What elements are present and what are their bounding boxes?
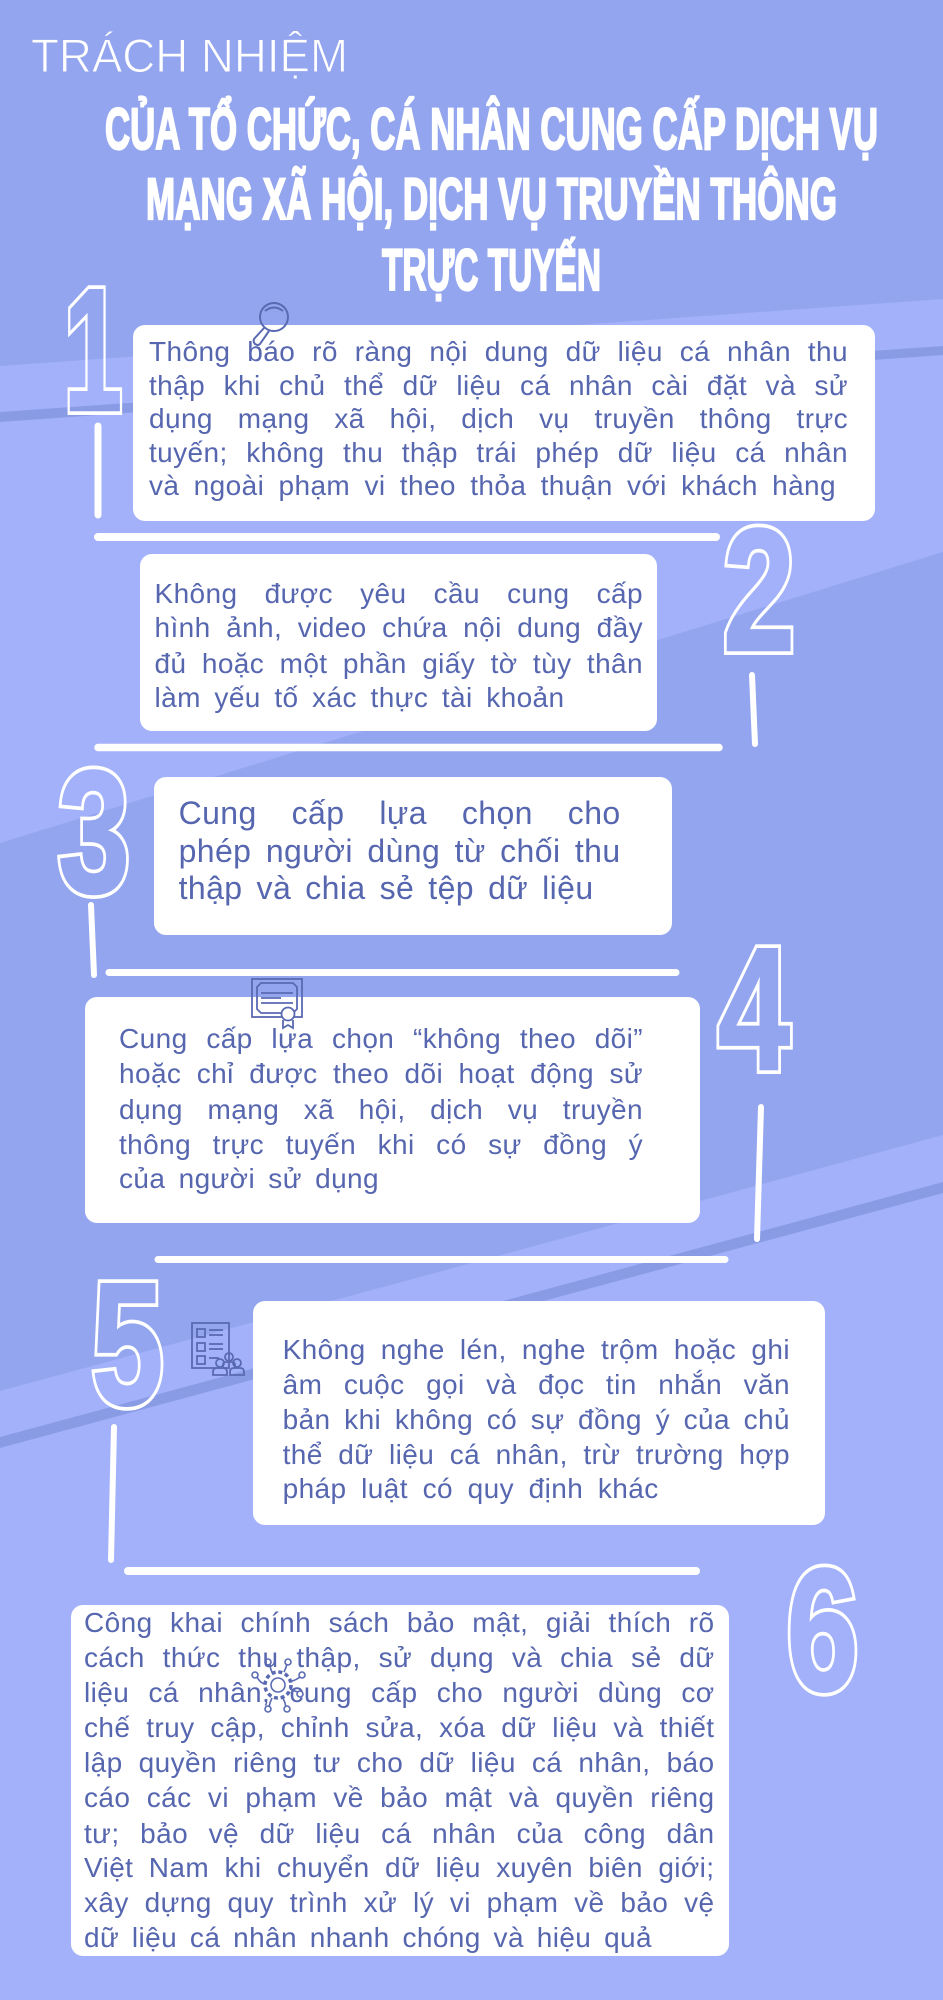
- panel: card 3: [154, 777, 672, 935]
- panel: card 6: cách thức thu thập, sử dụng và chia sẻ dữ: [84, 1642, 714, 1673]
- panel: card 6: dữ liệu cá nhân nhanh chóng và hiệu quả: [84, 1922, 652, 1953]
- panel: card 2: làm yếu tố xác thực tài khoản: [154, 682, 564, 713]
- panel: card 4: hoặc chỉ được theo dõi hoạt động sử: [119, 1058, 643, 1089]
- icon: checklist with people: [191, 1322, 245, 1376]
- panel: card 3: phép người dùng từ chối thu: [179, 833, 621, 869]
- panel: card 1: dụng mạng xã hội, dịch vụ truyền thông trực: [149, 403, 848, 434]
- number 4: 4: [718, 912, 790, 1107]
- panel: card 5: thể dữ liệu cá nhân, trừ trường hợp: [283, 1439, 790, 1470]
- title: TRÁCH NHIỆM: TRÁCH NHIỆM: [31, 29, 348, 82]
- panel: card 6: tư; bảo vệ dữ liệu cá nhân của công dân: [84, 1818, 714, 1849]
- panel: card 5: pháp luật có quy định khác: [283, 1472, 659, 1504]
- panel: card 1: [133, 325, 875, 521]
- icon: certificate: [251, 978, 303, 1030]
- panel: card 4: dụng mạng xã hội, dịch vụ truyền: [119, 1094, 643, 1125]
- panel: card 6: chế truy cập, chỉnh sửa, xóa dữ liệu và thiết: [84, 1712, 714, 1743]
- number 3: 3: [58, 735, 130, 930]
- panel: card 5: [253, 1301, 825, 1525]
- number 5: 5: [92, 1247, 163, 1442]
- icon: magnifier: [252, 302, 289, 346]
- panel: card 4: Cung cấp lựa chọn “không theo dõi”: [119, 1023, 643, 1054]
- panel: card 5: Không nghe lén, nghe trộm hoặc ghi: [283, 1334, 790, 1365]
- panel: card 6: lập quyền riêng tư cho dữ liệu cá nhân, báo: [84, 1747, 714, 1778]
- panel: card 4: [85, 997, 700, 1222]
- panel: card 6: Việt Nam khi chuyển dữ liệu xuyên biên giới;: [84, 1852, 714, 1883]
- heading: main title three lines: TRỰC TUYẾN: [382, 238, 601, 303]
- panel: card 1: và ngoài phạm vi theo thỏa thuận với khách hàng: [149, 470, 836, 501]
- panel: card 1: thập khi chủ thể dữ liệu cá nhân cài đặt và sử: [149, 370, 848, 400]
- panel: card 1: tuyến; không thu thập trái phép dữ liệu cá nhân: [149, 436, 848, 468]
- number 2: 2: [723, 493, 795, 688]
- panel: card 6: [71, 1605, 729, 1956]
- panel: card 4: của người sử dụng: [119, 1163, 379, 1194]
- panel: card 6: cáo các vi phạm về bảo mật và quyền riêng: [84, 1782, 714, 1813]
- panel: card 3: thập và chia sẻ tệp dữ liệu: [179, 870, 594, 906]
- panel: card 5: âm cuộc gọi và đọc tin nhắn văn: [283, 1369, 790, 1400]
- panel: card 6: xây dựng quy trình xử lý vi phạm về bảo vệ: [84, 1887, 714, 1918]
- panel: card 6: liệu cá nhân, cung cấp cho người dùng cơ: [84, 1677, 714, 1708]
- panel: card 2: hình ảnh, video chứa nội dung đầy: [154, 612, 643, 643]
- number 6: 6: [787, 1533, 858, 1728]
- panel: card 1: Thông báo rõ ràng nội dung dữ liệu cá nhân thu: [149, 336, 848, 367]
- panel: card 3: Cung cấp lựa chọn cho: [179, 795, 621, 831]
- panel: card 4: thông trực tuyến khi có sự đồng ý: [119, 1129, 643, 1160]
- panel: card 2: [140, 554, 657, 731]
- panel: card 5: bản khi không có sự đồng ý của chủ: [283, 1404, 790, 1435]
- panel: card 2: Không được yêu cầu cung cấp: [154, 578, 643, 609]
- panel: card 6: Công khai chính sách bảo mật, giải thích rõ: [84, 1607, 714, 1638]
- number 1: 1: [64, 254, 122, 448]
- heading: main title three lines: [105, 95, 878, 303]
- panel: card 2: đủ hoặc một phần giấy tờ tùy thân: [154, 648, 643, 679]
